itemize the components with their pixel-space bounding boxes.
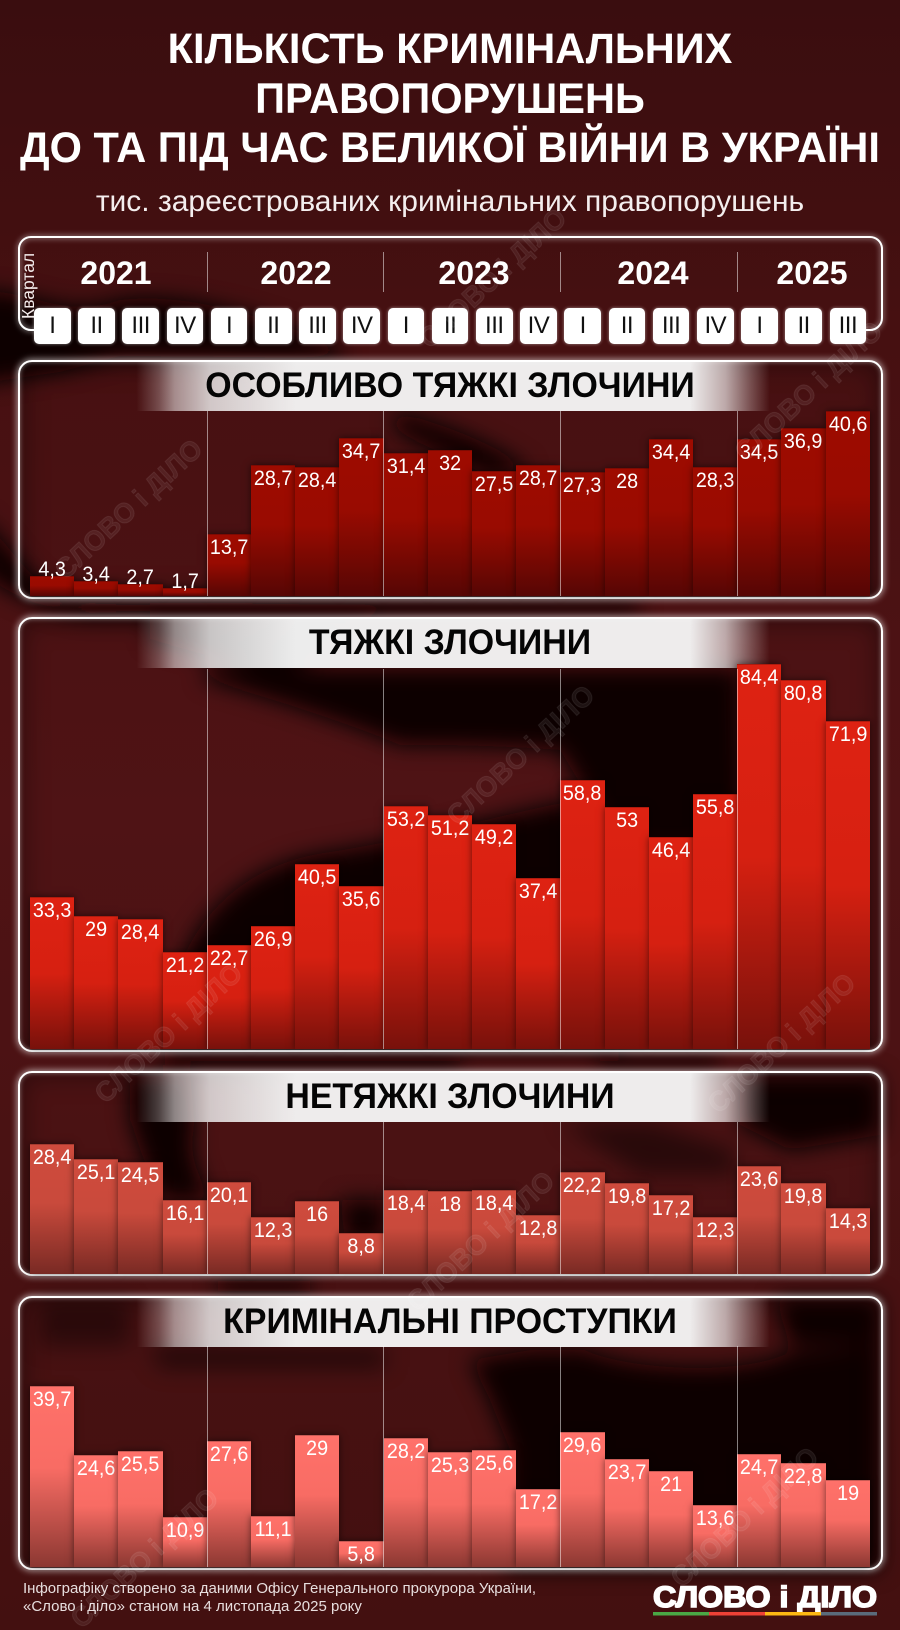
years row: 2024 xyxy=(617,255,689,291)
bar chart: criminal misdemeanours xyxy=(26,1346,874,1572)
quarter buttons: III xyxy=(308,312,327,339)
bar chart: criminal misdemeanours: 25,6 xyxy=(475,1452,513,1475)
bar chart: criminal misdemeanours: 21 xyxy=(660,1473,682,1496)
panel: grave crimes xyxy=(18,617,883,1052)
heading band: НЕТЯЖКІ ЗЛОЧИНИ xyxy=(285,1077,615,1116)
bar chart: especially grave crimes: 32 xyxy=(439,452,461,475)
watermarks: СЛОВО і ДІЛО xyxy=(412,202,573,354)
bar chart: non-grave crimes: 16,1 xyxy=(166,1202,204,1225)
bar chart: grave crimes: 22,7 xyxy=(210,947,248,970)
bar chart: especially grave crimes: 34,4 xyxy=(652,441,690,464)
bar chart: criminal misdemeanours: 39,7 xyxy=(33,1388,71,1411)
bar chart: especially grave crimes: 40,6 xyxy=(829,413,867,436)
bar chart: non-grave crimes xyxy=(25,1122,874,1278)
bar chart: non-grave crimes: 18 xyxy=(439,1193,461,1216)
bar chart: grave crimes: 53 xyxy=(616,809,638,832)
quarter buttons: II xyxy=(621,312,633,339)
bar chart: grave crimes: 53,2 xyxy=(387,808,425,831)
heading band xyxy=(130,619,770,668)
bar chart: grave crimes: 46,4 xyxy=(652,839,690,862)
quarter buttons: II xyxy=(267,312,279,339)
bar chart: grave crimes: 80,8 xyxy=(784,682,823,705)
heading band xyxy=(130,1073,770,1122)
watermarks: СЛОВО і ДІЛО xyxy=(664,1441,825,1593)
bar chart: grave crimes: 21,2 xyxy=(166,954,204,977)
quarter buttons: IV xyxy=(704,312,726,339)
bar chart: grave crimes: 40,5 xyxy=(298,866,337,889)
footer source note: «Слово і діло» станом на 4 листопада 2025 року xyxy=(23,1598,362,1615)
bar chart: grave crimes: 35,6 xyxy=(342,888,381,911)
bar chart: criminal misdemeanours: 25,5 xyxy=(121,1453,160,1476)
bar chart: non-grave crimes: 12,3 xyxy=(254,1219,292,1242)
heading band: КРИМІНАЛЬНІ ПРОСТУПКИ xyxy=(223,1302,677,1341)
bar chart: especially grave crimes: 28,7 xyxy=(254,467,292,490)
quarter buttons: II xyxy=(444,312,456,339)
quarter buttons: IV xyxy=(351,312,373,339)
bar chart: criminal misdemeanours: 11,1 xyxy=(255,1518,292,1541)
panel: timeline header xyxy=(14,232,888,336)
label: quarter: Квартал xyxy=(18,253,38,319)
bar chart: criminal misdemeanours: 17,2 xyxy=(519,1491,558,1514)
bar chart: criminal misdemeanours: 13,6 xyxy=(696,1507,734,1530)
quarter buttons: I xyxy=(403,312,409,339)
bar chart: non-grave crimes: 28,4 xyxy=(33,1146,71,1169)
bar chart: non-grave crimes: 20,1 xyxy=(210,1184,248,1207)
bar chart: criminal misdemeanours: 25,3 xyxy=(431,1454,469,1477)
bar chart: non-grave crimes: 8,8 xyxy=(348,1235,375,1258)
bar chart: non-grave crimes: 12,3 xyxy=(696,1219,734,1242)
bar chart: grave crimes: 26,9 xyxy=(254,928,292,951)
quarter buttons: IV xyxy=(174,312,196,339)
bar chart: especially grave crimes: 2,7 xyxy=(127,566,154,589)
years row: 2022 xyxy=(260,255,332,291)
title xyxy=(20,25,880,172)
bar chart: non-grave crimes: 22,2 xyxy=(563,1174,602,1197)
years row: 2023 xyxy=(438,255,510,291)
bar chart: especially grave crimes: 13,7 xyxy=(210,536,248,558)
watermarks: СЛОВО і ДІЛО xyxy=(88,957,249,1109)
bar chart: grave crimes: 84,4 xyxy=(740,666,779,689)
heading band: ТЯЖКІ ЗЛОЧИНИ xyxy=(309,623,591,662)
title: КІЛЬКІСТЬ КРИМІНАЛЬНИХ xyxy=(168,25,732,73)
bar chart: grave crimes: 71,9 xyxy=(829,723,867,746)
bar chart: especially grave crimes: 28,7 xyxy=(519,467,558,490)
bar chart: non-grave crimes: 17,2 xyxy=(652,1197,690,1220)
bar chart: non-grave crimes: 12,8 xyxy=(519,1217,558,1240)
bar chart: non-grave crimes: 18,4 xyxy=(387,1192,425,1215)
bar chart: grave crimes: 33,3 xyxy=(33,899,71,922)
bar chart: especially grave crimes: 3,4 xyxy=(83,562,110,586)
bar chart: criminal misdemeanours: 29 xyxy=(306,1437,328,1460)
bar chart: non-grave crimes: 14,3 xyxy=(829,1210,867,1233)
bar chart: criminal misdemeanours: 23,7 xyxy=(608,1461,646,1484)
watermarks: СЛОВО і ДІЛО xyxy=(400,1165,561,1317)
bar chart: especially grave crimes: 28 xyxy=(616,470,638,493)
years row: 2021 xyxy=(80,255,152,291)
watermarks: СЛОВО і ДІЛО xyxy=(440,679,601,831)
bar chart: non-grave crimes: 18,4 xyxy=(475,1192,513,1215)
bar chart: grave crimes: 37,4 xyxy=(519,880,558,903)
watermarks: СЛОВО і ДІЛО xyxy=(701,967,862,1119)
bar chart: non-grave crimes: 23,6 xyxy=(740,1168,779,1191)
bar chart: grave crimes: 51,2 xyxy=(431,817,469,840)
panel: non-grave crimes xyxy=(18,1071,883,1276)
bar chart: grave crimes: 58,8 xyxy=(563,782,602,805)
bar chart: criminal misdemeanours: 24,6 xyxy=(77,1457,116,1480)
bar chart: criminal misdemeanours: 24,7 xyxy=(740,1456,779,1479)
title: ДО ТА ПІД ЧАС ВЕЛИКОЇ ВІЙНИ В УКРАЇНІ xyxy=(20,124,880,172)
bar chart: grave crimes: 28,4 xyxy=(121,921,160,944)
quarter buttons: III xyxy=(662,312,680,339)
quarter buttons: III xyxy=(131,312,150,339)
bar chart: grave crimes xyxy=(26,660,874,1054)
bar chart: especially grave crimes xyxy=(26,408,874,600)
quarter buttons: I xyxy=(756,312,763,339)
bar chart: criminal misdemeanours: 5,8 xyxy=(348,1543,375,1566)
bar chart: grave crimes: 29 xyxy=(85,918,107,941)
watermarks: СЛОВО і ДІЛО xyxy=(64,1482,225,1630)
quarter buttons: III xyxy=(485,312,504,339)
heading band xyxy=(130,362,770,411)
logo: СЛОВО і ДІЛО xyxy=(653,1581,877,1614)
bar chart: non-grave crimes: 19,8 xyxy=(784,1185,823,1208)
quarter buttons xyxy=(32,306,868,346)
bar chart: grave crimes: 55,8 xyxy=(696,796,734,819)
quarter buttons: I xyxy=(49,312,55,339)
bar chart: criminal misdemeanours: 10,9 xyxy=(166,1519,204,1542)
bar chart: especially grave crimes: 34,5 xyxy=(740,441,779,464)
bar chart: especially grave crimes: 34,7 xyxy=(342,440,381,463)
bar chart: non-grave crimes: 16 xyxy=(306,1202,328,1226)
bar chart: especially grave crimes: 31,4 xyxy=(387,455,425,478)
bar chart: especially grave crimes: 1,7 xyxy=(171,570,198,593)
bar chart: especially grave crimes: 28,3 xyxy=(696,469,734,492)
bar chart: criminal misdemeanours: 29,6 xyxy=(563,1434,602,1457)
quarter buttons: I xyxy=(226,312,232,339)
bar chart: criminal misdemeanours: 19 xyxy=(837,1482,859,1505)
heading band: ОСОБЛИВО ТЯЖКІ ЗЛОЧИНИ xyxy=(205,366,695,405)
panel: criminal misdemeanours xyxy=(18,1296,883,1570)
quarter buttons: II xyxy=(90,312,103,339)
watermarks: СЛОВО і ДІЛО xyxy=(48,433,209,585)
bar chart: non-grave crimes: 19,8 xyxy=(608,1185,646,1208)
bar chart: especially grave crimes: 28,4 xyxy=(298,468,337,492)
bar chart: especially grave crimes: 27,3 xyxy=(563,474,602,496)
header frame xyxy=(14,232,888,336)
bar chart: grave crimes: 49,2 xyxy=(475,826,513,849)
watermarks: СЛОВО і ДІЛО xyxy=(728,315,889,467)
quarter buttons: IV xyxy=(528,312,549,339)
footer source note: Інфографіку створено за даними Офісу Генерального прокурора України, xyxy=(23,1580,536,1597)
bar chart: especially grave crimes: 4,3 xyxy=(38,558,66,581)
bar chart: non-grave crimes: 25,1 xyxy=(77,1161,116,1184)
quarter buttons: I xyxy=(580,312,586,339)
bar chart: especially grave crimes: 27,5 xyxy=(475,473,513,496)
quarter buttons: III xyxy=(839,312,857,339)
footer source note xyxy=(23,1580,536,1615)
bar chart: criminal misdemeanours: 22,8 xyxy=(784,1465,823,1488)
years row xyxy=(80,252,848,292)
quarter buttons: II xyxy=(798,312,810,339)
title: ПРАВОПОРУШЕНЬ xyxy=(255,75,645,123)
panel: especially grave crimes xyxy=(18,360,883,599)
bar chart: criminal misdemeanours: 28,2 xyxy=(387,1440,425,1463)
years row: 2025 xyxy=(776,255,848,291)
bar chart: non-grave crimes: 24,5 xyxy=(121,1164,160,1187)
heading band xyxy=(130,1298,770,1347)
subtitle: тис. зареєстрованих кримінальних правопорушень xyxy=(96,185,804,218)
bar chart: especially grave crimes: 36,9 xyxy=(784,430,823,453)
bar chart: criminal misdemeanours: 27,6 xyxy=(210,1443,248,1466)
